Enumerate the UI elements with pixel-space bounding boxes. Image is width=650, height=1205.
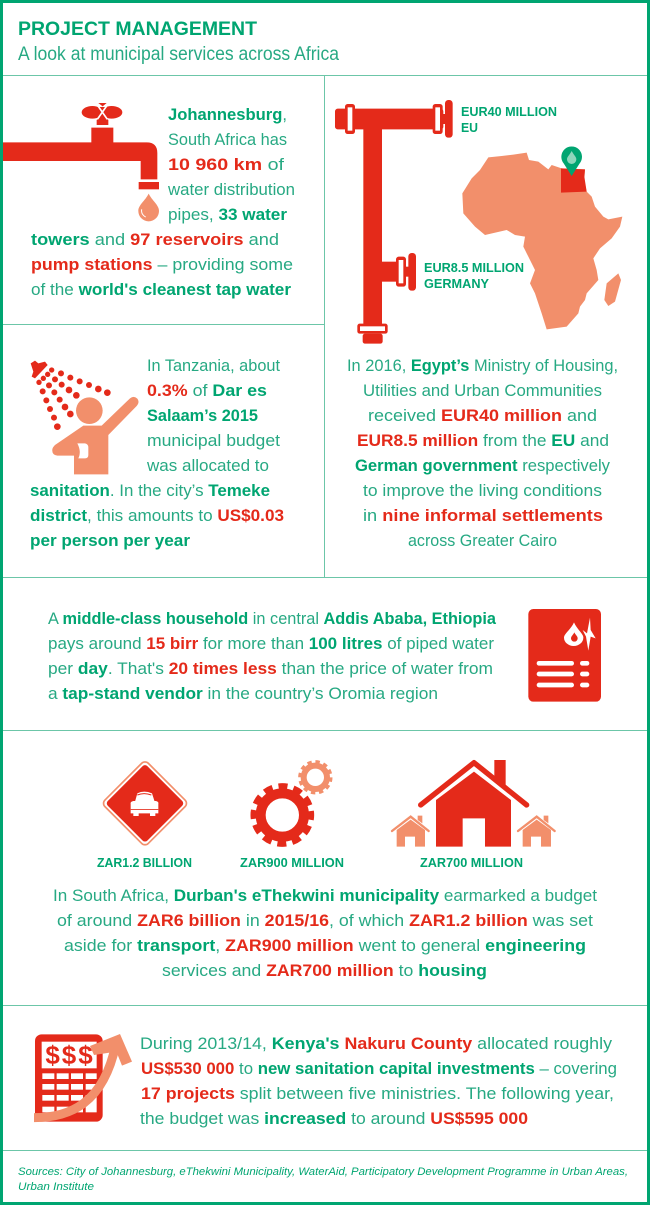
- text: Durban budget: In South Africa, Durban's eThekwini municipality earmarked a budget: [53, 886, 597, 905]
- panel: Johannesburg: [3, 103, 295, 299]
- text: Egypt funding: In 2016, Egypt’s Ministry of Housing,: [347, 356, 618, 375]
- text: Nakuru County budget: 17 projects split between five ministries. The following year,: [141, 1084, 614, 1103]
- text: Johannesburg facts: towers and 97 reservoirs and: [31, 230, 279, 249]
- panel: Durban: [53, 760, 597, 980]
- text: Johannesburg facts: pump stations – providing some: [31, 255, 293, 274]
- text: Addis Ababa water price: a tap-stand vendor in the country’s Oromia region: [48, 684, 438, 703]
- text: Egypt funding: Utilities and Urban Communities: [363, 381, 602, 400]
- sources: Urban Institute: [18, 1181, 94, 1193]
- icon: water tap: [3, 103, 159, 221]
- label: EUR40 million EU: EUR40 MILLION: [461, 104, 557, 119]
- text: Johannesburg facts: water distribution: [167, 180, 295, 199]
- label: EUR8.5 million Germany: EUR8.5 MILLION: [424, 260, 524, 275]
- sources: [18, 1166, 628, 1193]
- panel: Egypt: [335, 100, 622, 550]
- text: Tanzania sanitation budget: district, this amounts to US$0.03: [30, 506, 284, 525]
- text: Tanzania sanitation budget: [30, 356, 284, 550]
- icon: calculator with rising arrow: [34, 1034, 132, 1122]
- text: Johannesburg facts: [31, 105, 295, 299]
- text: Johannesburg facts: 10 960 km of: [168, 155, 284, 174]
- label: ZAR900 million: ZAR900 MILLION: [240, 855, 344, 870]
- text: Johannesburg facts: pipes, 33 water: [168, 205, 287, 224]
- text: Tanzania sanitation budget: In Tanzania, about: [147, 356, 280, 375]
- text: Tanzania sanitation budget: 0.3% of Dar es: [147, 381, 267, 400]
- label: EUR40 million EU: EU: [461, 120, 478, 135]
- text: Tanzania sanitation budget: Salaam’s 2015: [147, 406, 258, 425]
- text: Durban budget: aside for transport, ZAR900 million went to general engineering: [64, 936, 586, 955]
- text: Durban budget: [53, 886, 597, 980]
- title: PROJECT MANAGEMENT: [18, 18, 257, 40]
- text: Egypt funding: to improve the living conditions: [363, 481, 602, 500]
- subtitle: A look at municipal services across Africa: [18, 44, 339, 65]
- panel: Addis Ababa: [48, 609, 601, 703]
- text: Tanzania sanitation budget: was allocated to: [146, 456, 269, 475]
- text: Nakuru County budget: During 2013/14, Kenya's Nakuru County allocated roughly: [140, 1034, 613, 1053]
- icon: utility bill: [528, 609, 601, 702]
- icon: person showering: [31, 361, 139, 474]
- text: Egypt funding: received EUR40 million and: [368, 406, 597, 425]
- label: EUR40 million EU: [461, 104, 557, 135]
- text: Egypt funding: German government respectively: [355, 456, 610, 475]
- text: Tanzania sanitation budget: municipal budget: [147, 431, 280, 450]
- text: Egypt funding: EUR8.5 million from the EU and: [357, 431, 609, 450]
- icon: houses: [392, 760, 555, 847]
- label: EUR8.5 million Germany: GERMANY: [424, 276, 489, 291]
- icon: engineering gears: [250, 762, 331, 848]
- text: Tanzania sanitation budget: sanitation. In the city’s Temeke: [30, 481, 270, 500]
- text: Johannesburg facts: Johannesburg,: [168, 105, 287, 124]
- icon: location pin: [561, 146, 582, 176]
- icon: calculator with rising arrow: $$$: [45, 1040, 93, 1070]
- icon: water pipes: [335, 100, 453, 344]
- text: Addis Ababa water price: [48, 609, 497, 703]
- text: Durban budget: services and ZAR700 million to housing: [162, 961, 487, 980]
- icon: transport road sign: [102, 760, 188, 847]
- map: Africa: [462, 146, 622, 329]
- text: Johannesburg facts: of the world's cleanest tap water: [31, 280, 291, 299]
- text: Egypt funding: in nine informal settlements: [363, 506, 603, 525]
- label: EUR8.5 million Germany: [424, 260, 524, 291]
- text: Egypt funding: across Greater Cairo: [408, 531, 557, 550]
- text: Durban budget: of around ZAR6 billion in 2015/16, of which ZAR1.2 billion was set: [57, 911, 593, 930]
- text: Addis Ababa water price: per day. That's 20 times less than the price of water from: [48, 659, 493, 678]
- text: Johannesburg facts: South Africa has: [168, 130, 287, 149]
- text: Addis Ababa water price: pays around 15 birr for more than 100 litres of piped water: [48, 634, 494, 653]
- panel: Tanzania: [30, 356, 284, 550]
- text: Addis Ababa water price: A middle-class household in central Addis Ababa, Ethiopia: [48, 609, 497, 628]
- text: Tanzania sanitation budget: per person per year: [30, 531, 190, 550]
- panel: Nakuru: [34, 1034, 617, 1128]
- text: Nakuru County budget: [140, 1034, 617, 1128]
- text: Nakuru County budget: US$530 000 to new sanitation capital investments – covering: [141, 1059, 617, 1078]
- text: Nakuru County budget: the budget was increased to around US$595 000: [140, 1109, 528, 1128]
- text: Egypt funding: [347, 356, 618, 550]
- label: ZAR1.2 billion: ZAR1.2 BILLION: [97, 855, 192, 870]
- label: ZAR700 million: ZAR700 MILLION: [420, 855, 523, 870]
- sources: Sources: City of Johannesburg, eThekwini Municipality, WaterAid, Participatory Development Programme in Urban Areas,: [18, 1166, 628, 1178]
